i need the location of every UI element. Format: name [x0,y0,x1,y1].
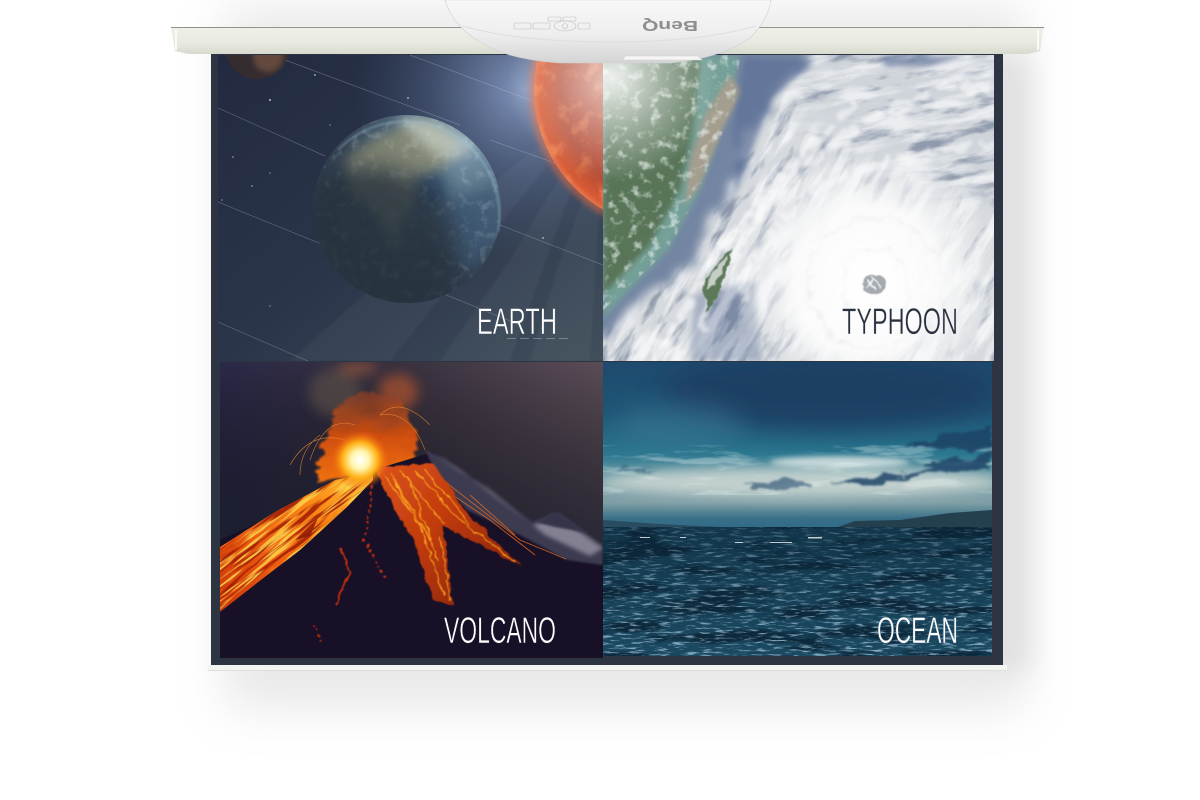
projection screen scene [171,0,1044,718]
label: volcano: VOLCANO [444,610,556,651]
sun rays [290,100,603,361]
wall shadow behind screen [225,8,1033,708]
projector control buttons [514,17,590,31]
stars [221,74,544,307]
moon [226,55,288,79]
eruption sparks [290,407,430,475]
projector logo: BenQ [642,17,698,34]
sun [526,60,603,219]
dusk sky [220,362,603,544]
whitecaps [640,537,822,543]
mountain silhouette [220,452,603,658]
label: earth: EARTH [477,301,557,342]
panel: ocean [600,354,1000,656]
dark cloud streaks [610,425,992,490]
space background [218,55,603,361]
spiral cloud bands [650,86,994,361]
dark sea gaps [690,56,965,361]
crater blast [334,432,389,489]
panel: earth [218,55,603,361]
smoke plume [309,362,418,416]
stormy sky [603,354,1000,530]
label: typhoon: TYPHOON [842,301,958,342]
coast and land [603,55,743,325]
projector [445,0,771,63]
earth globe [313,115,502,303]
panel: typhoon [603,55,994,361]
sun glare over earth panel edge [500,55,603,190]
bright cloud band [600,445,1000,497]
night shadow [313,150,471,303]
screen casing frame [211,50,1003,665]
cloud masses [603,55,994,361]
snow slope [425,450,603,565]
distant headlands [603,510,992,528]
top roller housing [171,27,1044,54]
bottom weight bar [208,665,1007,671]
panel: volcano [220,362,603,658]
typhoon vortex [739,158,994,361]
lava rivulets [313,485,385,640]
typhoon eye [862,274,886,294]
ocean background [603,55,870,344]
sea [603,527,992,656]
lava flow: left [220,474,373,612]
label: ocean: OCEAN [877,610,958,651]
orbit lines [218,55,603,362]
taiwan island [702,250,732,312]
projector glare [603,58,709,176]
projector lens slot [623,56,702,60]
continents [345,117,498,270]
dashed mark under earth label [507,338,568,339]
lava fountain plume [318,392,418,482]
lava flow: right [377,463,522,607]
